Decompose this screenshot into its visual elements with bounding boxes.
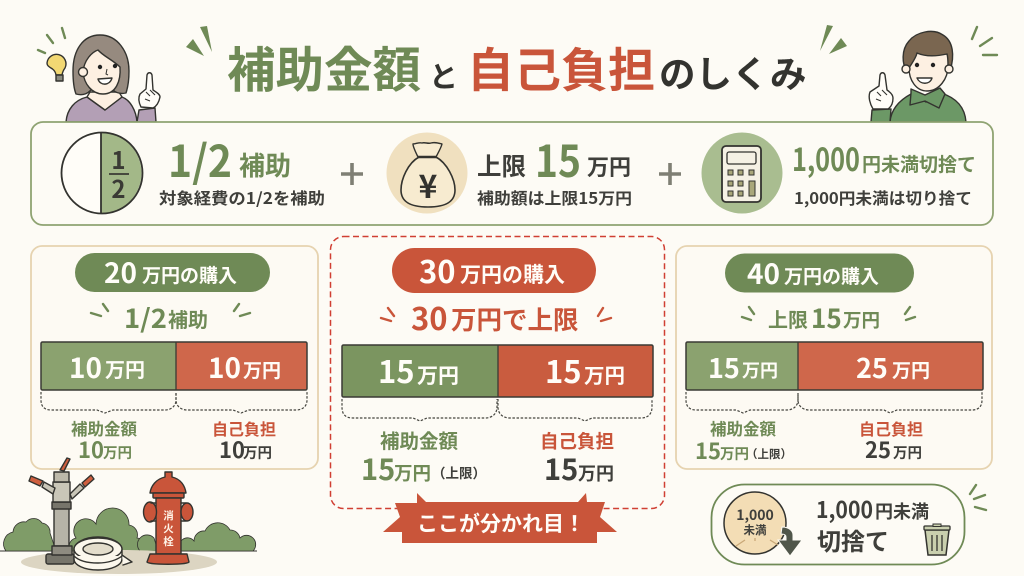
label: self-pay amount: 万円 — [243, 442, 272, 463]
subheading — [381, 294, 611, 339]
stacked bar: 万円 — [243, 356, 281, 383]
hose coil — [74, 537, 132, 570]
label: subsidy amount: 補助金額 — [380, 425, 459, 454]
man character — [869, 27, 997, 122]
label: self-pay amount: 万円 — [578, 460, 614, 486]
pill heading — [75, 252, 270, 292]
rule: half subsidy text: 補助 — [239, 146, 291, 183]
label: subsidy amount: （上限） — [432, 462, 486, 482]
stacked bar: 万円 — [105, 354, 145, 383]
rule: rounding text — [792, 135, 976, 209]
pill heading: 20 — [104, 252, 137, 292]
label: self-pay amount: 万円 — [893, 442, 922, 463]
stacked bar: 10 — [69, 347, 102, 387]
icon: trash can — [924, 524, 950, 555]
panel: three rules — [31, 122, 993, 225]
rule: upper limit text — [477, 126, 632, 209]
label: subsidy amount: 万円 — [103, 442, 132, 463]
icon: half circle fraction: 2 — [111, 170, 126, 205]
icon: money bag — [386, 132, 468, 214]
icon: half circle fraction — [62, 132, 142, 214]
label: subsidy amount: 補助金額 — [710, 416, 776, 440]
pill heading — [725, 253, 914, 293]
label: self-pay amount: 15 — [544, 447, 578, 489]
ribbon: turning point — [383, 493, 617, 543]
rule: rounding text: 1,000円未満は切り捨て — [794, 185, 972, 209]
pill heading — [392, 247, 596, 293]
plus sign — [341, 163, 363, 185]
label: self-pay amount: 25 — [865, 433, 891, 465]
label: self-pay amount — [859, 416, 923, 465]
stacked bar — [342, 345, 653, 397]
label: subsidy amount: 15 — [361, 447, 395, 489]
red hydrant — [144, 472, 193, 564]
subheading: 補助 — [168, 304, 208, 333]
subheading: 万円 — [843, 307, 880, 333]
label: subsidy amount: 15 — [695, 434, 721, 466]
callout accent rays — [970, 485, 986, 510]
label: subsidy amount — [361, 425, 486, 489]
ground shadow — [21, 550, 217, 574]
title: 補助金額 — [227, 31, 421, 101]
label: subsidy amount — [71, 416, 138, 465]
stacked bar — [41, 342, 307, 390]
bushes — [4, 508, 256, 551]
callout text: 切捨て — [817, 522, 889, 557]
title accent rays left — [186, 26, 212, 56]
subheading: 上限 — [768, 304, 808, 333]
rule: rounding text: 1,000 — [792, 135, 860, 181]
illustration: fire hydrants and bushes — [0, 458, 257, 574]
woman character — [38, 28, 160, 122]
icon: calculator — [702, 132, 782, 214]
subheading — [91, 299, 250, 336]
rule: half subsidy text — [159, 126, 325, 209]
title: のしくみ — [659, 45, 806, 98]
callout text: 円未満 — [875, 498, 929, 524]
stacked bar: 万円 — [742, 357, 778, 383]
label: subsidy amount: 万円 — [394, 460, 431, 486]
subheading: 1/2 — [124, 299, 167, 336]
red hydrant: 栓 — [163, 534, 174, 549]
rule: rounding text: 円未満切捨て — [862, 150, 976, 177]
ribbon: turning point: ここが分かれ目！ — [417, 508, 585, 538]
stacked bar: 10 — [208, 347, 241, 387]
stacked bar: 万円 — [584, 359, 625, 389]
ground line — [0, 550, 257, 552]
label: subsidy amount: 万円 — [720, 443, 749, 464]
label: self-pay amount: 自己負担 — [212, 416, 276, 440]
label: subsidy amount: 10 — [78, 433, 104, 465]
brace: subsidy and self-pay — [686, 392, 982, 413]
title — [227, 31, 806, 101]
rule: upper limit text: 15 — [535, 126, 581, 190]
rule: upper limit text: 補助額は上限15万円 — [477, 185, 632, 209]
plus sign — [659, 163, 681, 185]
brace: subsidy and self-pay — [41, 392, 307, 413]
label: subsidy amount: 補助金額 — [71, 416, 138, 440]
stacked bar: 25 — [856, 347, 888, 386]
brace: subsidy and self-pay — [342, 399, 652, 421]
icon: coin with arrow: 未満 — [744, 522, 767, 538]
pill heading: 40 — [747, 253, 780, 293]
pill heading: 万円の購入 — [784, 262, 879, 289]
icon: coin with arrow — [724, 492, 802, 556]
pill heading: 万円の購入 — [460, 259, 565, 289]
label: self-pay amount — [540, 428, 614, 489]
callout: rounding down — [712, 484, 964, 564]
label: self-pay amount: 自己負担 — [859, 416, 923, 440]
red hydrant: 火 — [163, 521, 174, 536]
rule: upper limit text: 万円 — [587, 150, 631, 182]
stacked bar — [686, 342, 983, 390]
panel: 30万円 purchase highlighted — [330, 236, 664, 508]
title: と — [429, 54, 458, 96]
icon: coin with arrow: 1,000 — [736, 505, 774, 525]
stacked bar: 万円 — [892, 356, 930, 383]
subheading — [742, 299, 915, 336]
callout text: 1,000 — [816, 491, 873, 525]
subheading: 30 — [411, 294, 448, 339]
red hydrant: 消 — [163, 508, 174, 523]
label: self-pay amount: 10 — [219, 433, 245, 465]
title: 自己負担 — [467, 32, 655, 101]
callout text — [816, 491, 929, 557]
stacked bar: 万円 — [417, 360, 459, 390]
stacked bar: 15 — [545, 347, 582, 392]
rule: half subsidy text: 対象経費の1/2を補助 — [159, 185, 325, 209]
icon: half circle fraction: 1 — [111, 141, 126, 176]
pill heading: 万円の購入 — [142, 261, 237, 288]
rule: upper limit text: 上限 — [477, 148, 526, 183]
panel: 20万円 purchase — [31, 246, 318, 469]
label: self-pay amount — [212, 416, 276, 465]
pill heading: 30 — [419, 247, 456, 292]
panel: 40万円 purchase — [676, 246, 992, 469]
rule: half subsidy text: 1/2 — [168, 126, 232, 190]
standpipe — [29, 458, 94, 564]
title accent rays right — [820, 25, 847, 54]
icon: light bulb — [38, 28, 66, 81]
label: subsidy amount: （上限） — [746, 446, 792, 462]
stacked bar: 15 — [708, 347, 740, 386]
icon: money bag: ¥ — [419, 162, 438, 208]
label: subsidy amount — [695, 416, 792, 466]
subheading: 万円で上限 — [451, 300, 579, 337]
subheading: 15 — [811, 299, 842, 336]
stacked bar: 15 — [378, 347, 415, 392]
label: self-pay amount: 自己負担 — [540, 428, 614, 454]
